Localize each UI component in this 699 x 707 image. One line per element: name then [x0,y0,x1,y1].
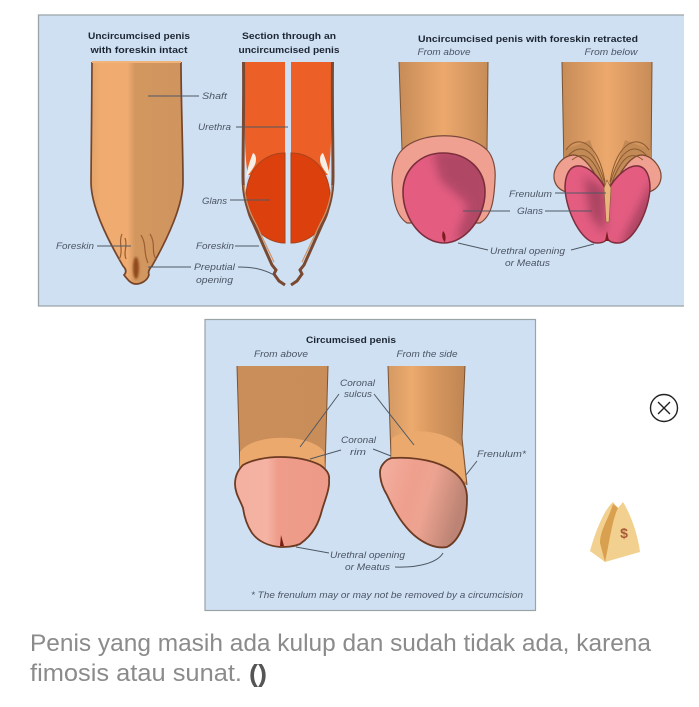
icon: money bag: $ [620,525,628,541]
illustration: circumcised from above [235,366,329,547]
leader lines and labels: first panel: Shaft [202,91,227,102]
leader lines and labels: second panel: sulcus [344,389,372,400]
panel: uncircumcised diagrams [38,15,684,306]
heading: section: Section through an [242,31,336,42]
heading: foreskin retracted: Uncircumcised penis with foreskin retracted [418,34,638,45]
footnote: * The frenulum may or may not be removed by a circumcision [251,590,523,601]
illustration: circumcised from side [380,366,467,547]
heading: circumcised: Circumcised penis [306,335,396,346]
leader lines and labels: first panel: Glans [202,196,227,207]
leader lines and labels: first panel: Frenulum [509,189,552,200]
leader lines and labels: first panel: Glans [517,206,543,217]
illustration: retracted from above [392,62,495,243]
caption: Penis yang masih ada kulup dan sudah tidak ada, karena [30,630,651,657]
leader lines and labels: first panel: Foreskin [56,241,94,252]
caption [30,630,651,688]
leader lines and labels: second panel: or Meatus [345,562,390,573]
leader lines and labels: first panel: opening [196,275,234,286]
leader lines and labels: second panel: Coronal [340,378,376,389]
subheading: from above: From above [254,349,308,360]
leader lines and labels: first panel: or Meatus [505,258,550,269]
leader lines and labels: second panel [251,378,526,601]
subheading: from below: From below [584,47,639,58]
leader lines and labels: second panel: rim [350,447,366,458]
leader lines and labels: first panel: Urethral opening [490,246,566,257]
leader lines and labels: second panel: Urethral opening [330,550,406,561]
icon: close button [650,394,678,422]
leader lines and labels: first panel: Foreskin [196,241,234,252]
leader lines and labels: first panel [56,91,606,286]
illustration: retracted from below [554,62,661,245]
illustration: foreskin intact [91,61,183,284]
leader lines and labels: second panel: Frenulum* [477,449,526,460]
heading: section line 2: uncircumcised penis [238,45,340,56]
heading: foreskin intact: Uncircumcised penis [88,31,190,42]
caption: fimosis atau sunat. [30,660,242,687]
subheading: from above: From above [418,47,470,58]
illustration: section view [243,62,333,285]
icon: money bag [590,502,640,562]
panel: circumcised diagrams [205,320,536,610]
leader lines and labels: second panel: Coronal [341,435,377,446]
subheading: from the side: From the side [396,349,458,360]
caption: () [249,660,267,688]
leader lines and labels: first panel: Preputial [194,262,236,273]
leader lines and labels: first panel: Urethra [198,122,231,133]
heading: foreskin intact line 2: with foreskin intact [89,45,188,56]
